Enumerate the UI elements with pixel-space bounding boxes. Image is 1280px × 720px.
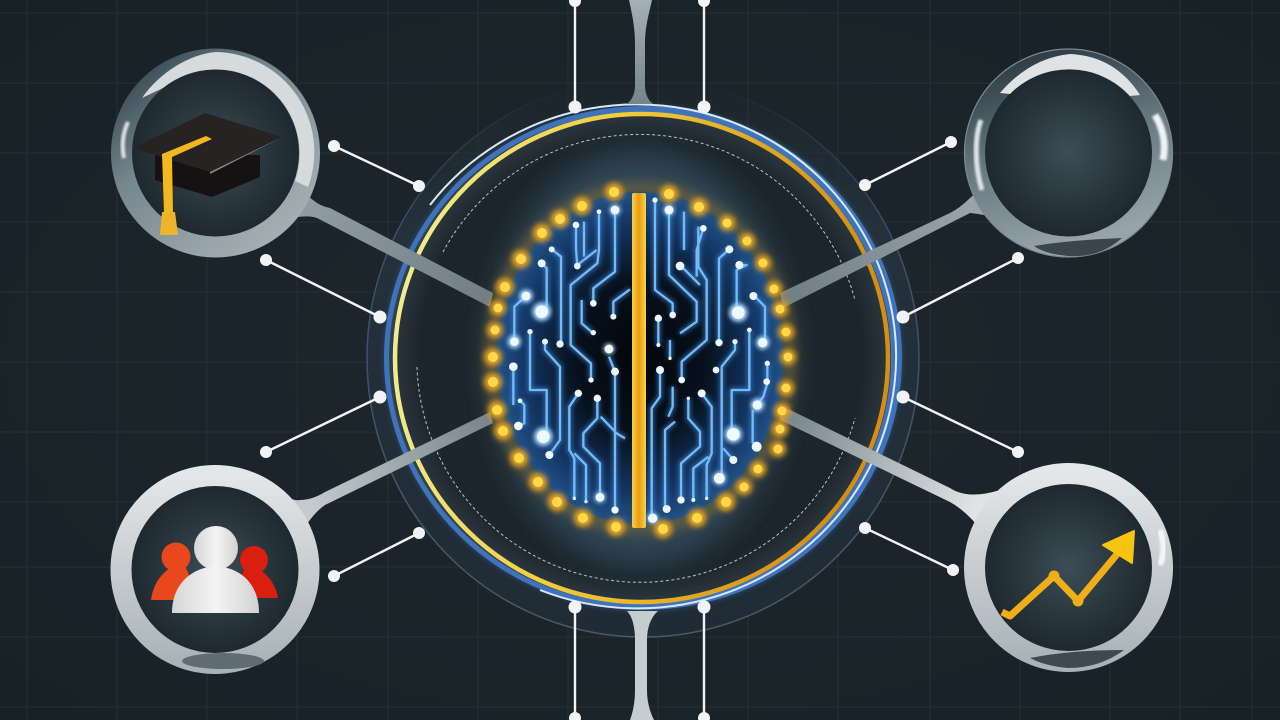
pin: top left vertical [568,0,582,114]
pin: bottom left vertical [568,600,582,720]
hub disc [389,110,893,606]
node: empty lens [964,49,1172,257]
icon: people [151,526,278,613]
connector: top left [285,190,493,307]
dashed inner arc: top [443,134,855,300]
node: growth arrow [974,474,1163,668]
right person [232,546,278,598]
center person [172,526,259,613]
lens [129,483,301,655]
ring right glint [1155,115,1164,160]
glass ring [121,476,309,664]
vertical connector: top [627,0,653,104]
node: people [121,476,309,669]
pin: upper left long [260,254,386,324]
slate glow around brain [490,150,790,566]
pin: upper right short [859,136,957,191]
pin: top right vertical [698,0,710,114]
ring rim [964,49,1172,257]
pin: lower right short [859,522,959,576]
glass ring [122,59,310,247]
pin: lower left short [328,527,425,582]
gold dots glow [484,183,796,538]
outer band ring [367,79,919,637]
brain gold halo [490,188,790,528]
trace glow [513,200,767,518]
glass ring [974,59,1162,247]
trace lines [513,200,767,518]
ring left glint [123,122,128,158]
connector: bottom left [280,412,493,535]
brain body [497,192,783,524]
lens [983,66,1155,238]
blue glow ring [387,108,899,608]
pin: lower left long [260,390,386,458]
lens [983,481,1155,653]
left person [151,542,200,600]
icon: graduation cap [133,113,282,235]
pin: upper right long [896,252,1024,324]
ring bottom shadow [1030,650,1124,668]
pin: upper left short [328,140,425,192]
icon: growth arrow [1002,531,1134,616]
ring top highlight [142,52,314,187]
circuit traces [508,197,770,524]
vertical connector: bottom [627,611,658,720]
gold dots [488,187,792,534]
pale outer arc [430,104,896,608]
pin: lower right long [896,390,1024,458]
central gold bar [632,193,646,528]
circuit nodes [509,197,770,523]
glass ring [974,474,1162,662]
ring top highlight [1000,54,1140,96]
gold ring [395,114,888,602]
ring left glint [976,120,982,190]
ring right glint [1160,530,1163,565]
node glow [508,205,769,524]
lens [130,67,302,239]
ring bottom shadow [182,653,264,669]
node: graduation cap [122,52,314,247]
pin: bottom right vertical [698,600,710,720]
dashed inner arc: bottom [417,367,855,582]
blue ring [384,106,902,610]
connector: bottom right [780,405,1000,535]
brain [484,183,796,538]
connector: top right [780,185,1000,308]
pin lines [260,0,1024,720]
ring bottom shadow [1034,238,1122,256]
central hub [367,79,919,637]
